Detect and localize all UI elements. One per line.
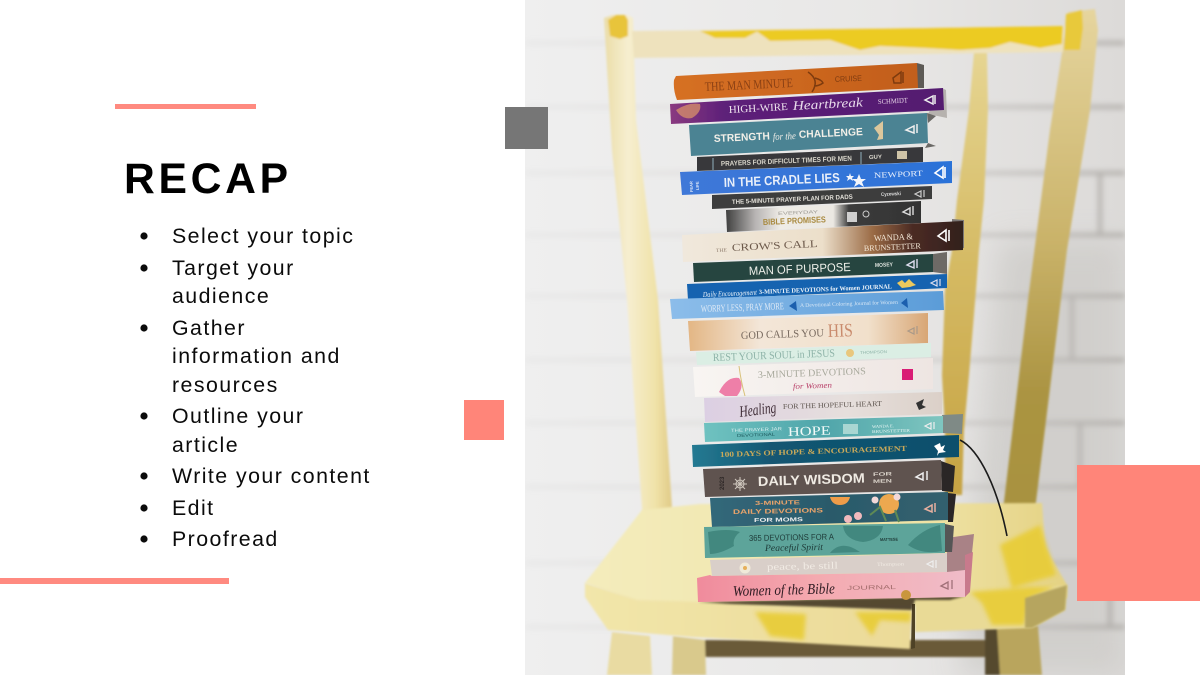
book: Rest Your Soul in Jesus: REST YOUR SOUL in JESUS [713,348,835,364]
list item: outline your article: Outline your [172,404,304,428]
book: God Calls You His [688,313,928,351]
left post [604,15,673,522]
book: Daily Wisdom for Men: DAILY WISDOM [758,470,865,489]
list item: proofread: Proofread [172,527,279,551]
list item: outline your article [140,404,304,457]
seat front right [915,585,1067,632]
book: The Man Minute: CRUISE [835,74,862,84]
photo: stack of books on a yellow chair [525,0,1125,675]
book: Healing for the Hopeful Heart: FOR THE HOPEFUL HEART [783,399,883,411]
book: The Prayer Jar Devotional: Hope: HOPE [788,423,831,439]
book: The Crow's Call: BRUNSTETTER [864,241,922,253]
decorative grey square [505,107,548,149]
decorative pink square [464,400,504,440]
bottom accent line [0,578,229,584]
book: Daily Encouragement journal [687,274,947,300]
book: Women of the Bible Journal: Women of the Bible [733,581,835,600]
list item: edit [140,496,215,520]
book: Prayers for Difficult Times for Men [697,147,923,171]
chair seat [585,503,1067,649]
book: Everyday Bible Promises: BIBLE PROMISES [763,214,826,227]
book: God Calls You His: GOD CALLS YOU [741,327,824,342]
book: High-Wire Heartbreak: SCHMIDT [878,96,909,106]
book: 3-Minute Daily Devotions for Moms [710,492,948,527]
chair legs [607,626,1042,675]
book: Daily Wisdom for Men: MEN [873,478,893,485]
book: Prayers for Difficult Times for Men: GUY [869,154,882,161]
book: 3-Minute Devotions for Women [693,358,933,397]
list item: target your audience [140,256,295,308]
book: In the Cradle Lies: NEWPORT [874,169,923,180]
decorative large pink rectangle [1077,465,1200,601]
middle spindle [942,52,988,495]
book: The 5-Minute Prayer Plan for Dads: Cyzewski [881,191,902,198]
list item: write your content: Write your content [172,464,371,488]
book: Strength for the Challenge: for the [773,131,797,143]
book: The 5-Minute Prayer Plan for Dads [712,186,932,209]
book: In the Cradle Lies: LIFE [695,181,700,190]
book: Man of Purpose: MOSEY [875,262,893,269]
list item: gather information and resources: resources [172,373,279,397]
book: 100 Days of Hope & Encouragement: 100 DAYS OF HOPE & ENCOURAGEMENT [720,444,907,459]
brick wall [525,0,1125,675]
seat front left [585,583,912,649]
book: In the Cradle Lies: FEAR [689,181,694,192]
book: Strength for the Challenge [689,113,928,156]
book: Healing for the Hopeful Heart: Healing [738,400,777,421]
book: The Man Minute: THE MAN MINUTE [704,75,793,94]
top accent line [115,104,256,109]
book: The Prayer Jar Devotional: Hope: THE PRAYER JAR [731,426,783,433]
book: Healing for the Hopeful Heart [704,392,942,422]
book: 365 Devotions for a Peaceful Spirit: 365 DEVOTIONS FOR A [749,532,834,543]
book: Man of Purpose: MAN OF PURPOSE [749,260,851,278]
book: Worry Less, Pray More: A Devotional Coloring Journal for Women [800,299,898,309]
book: Rest Your Soul in Jesus [696,343,931,365]
book: God Calls You His: HIS [827,320,853,342]
list item: target your audience: audience [172,284,270,308]
ribbon bookmark wire [960,440,1007,536]
book: High-Wire Heartbreak: Heartbreak [791,94,863,113]
book: Everyday Bible Promises: EVERYDAY [778,209,818,216]
book: The Crow's Call: WANDA & [874,231,913,243]
back edges [917,63,924,88]
book: Everyday Bible Promises [726,201,921,232]
shadow under the stack [698,596,965,610]
book: Peace, Be Still: peace, be still [767,561,838,573]
book: 3-Minute Devotions for Women: for Women [793,381,832,391]
book: 365 Devotions for a Peaceful Spirit [704,523,945,558]
book: 3-Minute Daily Devotions for Moms: DAILY DEVOTIONS [733,507,824,516]
book: 100 Days of Hope & Encouragement [692,435,959,467]
book: Peace, Be Still: Thompson [877,562,905,568]
gap in seat [911,604,915,649]
book: 365 Devotions for a Peaceful Spirit: Peaceful Spirit [764,542,823,554]
book: Man of Purpose [693,254,933,282]
book: The Prayer Jar Devotional: Hope: DEVOTIONAL [737,432,776,438]
book: In the Cradle Lies [680,161,952,195]
list item: edit: Edit [172,496,215,520]
paint wear yellow [755,525,1056,640]
title: RECAP: RECAP [124,155,292,203]
book: The Crow's Call [682,221,963,262]
book: The Prayer Jar Devotional: Hope: WANDA E. [872,423,894,429]
right post [1002,9,1098,522]
book: Strength for the Challenge: CHALLENGE [799,126,863,141]
list item: target your audience: Target your [172,256,295,280]
book: Women of the Bible Journal: JOURNAL [847,585,897,592]
book: 3-Minute Daily Devotions for Moms: FOR MOMS [754,517,803,524]
book: The Crow's Call: THE [716,248,727,254]
book: Daily Wisdom for Men: 2023 [720,476,726,490]
list item: select your topic: Select your topic [172,224,354,248]
book: 365 Devotions for a Peaceful Spirit: MATTESE [880,537,898,542]
book: The Man Minute [674,63,918,100]
seat top [585,503,1067,607]
book: The Prayer Jar Devotional: Hope [704,416,943,442]
bullet list [140,224,371,551]
book: Worry Less, Pray More: WORRY LESS, PRAY MORE [701,301,784,315]
book: 3-Minute Daily Devotions for Moms: 3-MINUTE [755,500,800,507]
list item: outline your article: article [172,433,239,457]
list item: gather information and resources: Gather [172,316,246,340]
book: Rest Your Soul in Jesus: THOMPSON [860,349,887,355]
book: Peace, Be Still [710,553,947,576]
book: Daily Wisdom for Men: FOR [873,471,893,478]
chair back [604,9,1098,522]
book: Prayers for Difficult Times for Men: PRAYERS FOR DIFFICULT TIMES FOR MEN [721,156,852,168]
book: Strength for the Challenge: STRENGTH [714,130,770,145]
book: High-Wire Heartbreak: HIGH-WIRE [729,102,788,116]
list item: gather information and resources: information and [172,344,341,368]
book stack [670,63,974,602]
book: Daily Wisdom for Men [703,460,942,497]
book: The Crow's Call: CROW'S CALL [732,239,818,254]
book: The 5-Minute Prayer Plan for Dads: THE 5-MINUTE PRAYER PLAN FOR DADS [732,194,854,206]
book: Daily Encouragement journal: 3-MINUTE DEVOTIONS for Women JOURNAL [759,283,892,296]
book: Daily Encouragement journal: Daily Encouragement [702,288,758,299]
book: The Prayer Jar Devotional: Hope: BRUNSTETTER [872,428,910,434]
list item: gather information and resources [140,316,341,397]
book: Women of the Bible Journal [697,552,973,602]
book: 3-Minute Devotions for Women: 3-MINUTE DEVOTIONS [758,366,866,381]
book: Worry Less, Pray More [670,291,944,319]
book: High-Wire Heartbreak [670,88,944,124]
back cover of journal [947,534,974,574]
top rail [632,26,1064,58]
book: In the Cradle Lies: IN THE CRADLE LIES [723,170,840,190]
